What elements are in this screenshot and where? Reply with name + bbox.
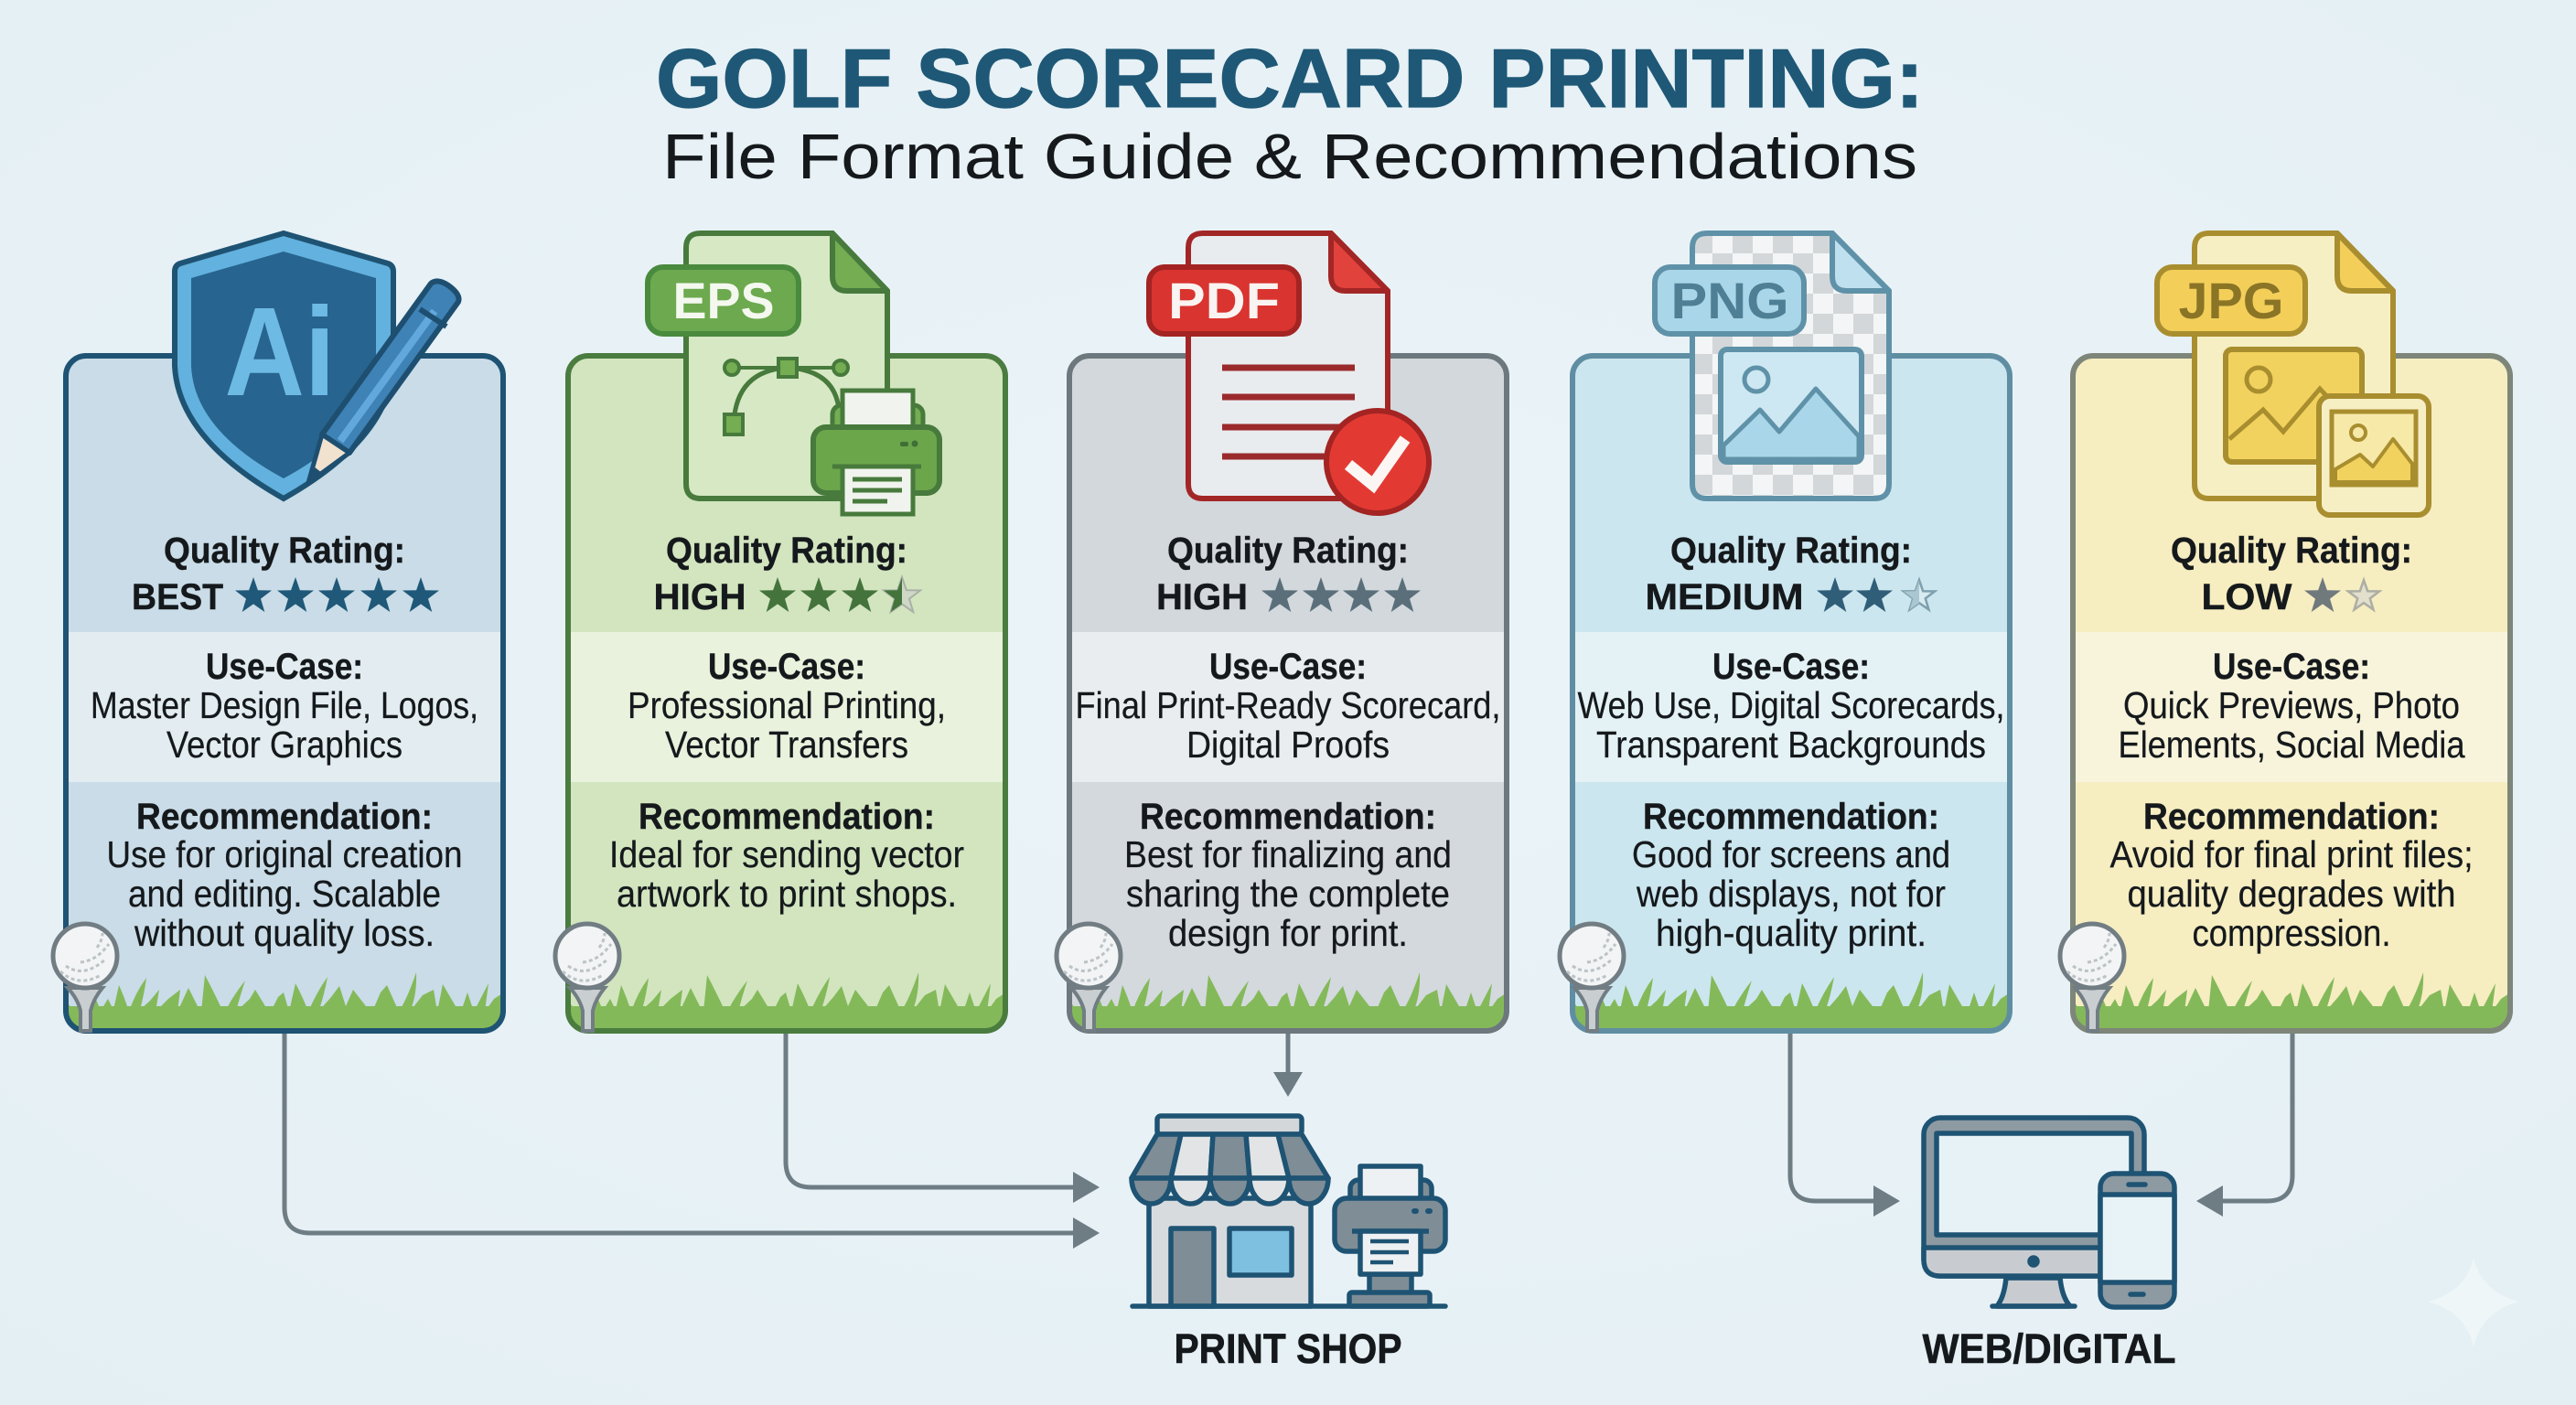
recommendation text: artwork to print shops.: [617, 873, 957, 915]
icon: golf ball on tee: [53, 924, 117, 1031]
recommendation text: design for print.: [1168, 912, 1408, 954]
icon: EPS file with printer: EPS: [673, 272, 774, 329]
quality rating: LOW: [2201, 577, 2292, 617]
use-case text: Quick Previews, Photo: [2123, 684, 2460, 726]
recommendation text: Avoid for final print files;: [2109, 833, 2474, 875]
quality rating: [1645, 531, 1935, 617]
use-case text: [628, 647, 946, 766]
recommendation text: web displays, not for: [1636, 873, 1946, 915]
use-case text: Use-Case:: [1712, 647, 1870, 687]
arrow: EPS to print shop: [786, 1034, 1100, 1203]
panel: EPS format: [555, 233, 1008, 1034]
title block: [656, 33, 1924, 192]
card background: [2069, 353, 2513, 1034]
icon: EPS file with printer: [648, 233, 939, 514]
use-case text: Elements, Social Media: [2119, 724, 2465, 766]
icon: golf ball on tee: [2060, 924, 2124, 1031]
label: web/digital: WEB/DIGITAL: [1923, 1325, 2175, 1372]
quality rating: [1156, 531, 1421, 617]
icon: two and a half stars: [1817, 577, 1935, 612]
card background: [564, 353, 1008, 1034]
recommendation text: [2109, 797, 2474, 954]
quality rating: Quality Rating:: [1670, 531, 1912, 571]
recommendation text: sharing the complete: [1126, 873, 1450, 915]
use-case text: Vector Graphics: [166, 724, 402, 766]
heading: GOLF SCORECARD PRINTING:: [656, 33, 1924, 125]
recommendation text: without quality loss.: [134, 912, 435, 954]
use-case text: [1577, 647, 2005, 766]
arrow: PNG to web/digital: [1790, 1034, 1900, 1217]
icon: JPG file with photos: [2157, 233, 2429, 515]
quality rating: Quality Rating:: [2171, 531, 2412, 571]
recommendation text: Ideal for sending vector: [609, 833, 964, 875]
recommendation text: high-quality print.: [1656, 912, 1927, 954]
icon: JPG file with photos: JPG: [2179, 272, 2283, 329]
card background: [1066, 353, 1509, 1034]
icon: golf ball on tee: [1560, 924, 1624, 1031]
quality rating: [132, 531, 439, 617]
use-case text: Professional Printing,: [628, 684, 946, 726]
subtitle: File Format Guide & Recommendations: [662, 121, 1917, 192]
icon: PDF file with check badge: PDF: [1168, 272, 1280, 329]
icon: golf ball on tee: [1057, 924, 1121, 1031]
icon: four stars: [1261, 577, 1421, 612]
recommendation text: and editing. Scalable: [128, 873, 441, 915]
icon: five stars: [235, 577, 439, 612]
use-case text: Final Print-Ready Scorecard,: [1076, 684, 1500, 726]
use-case text: Transparent Backgrounds: [1596, 724, 1986, 766]
panel: AI format: [53, 233, 506, 1034]
panel: PNG format: [1560, 233, 2012, 1034]
quality rating: MEDIUM: [1645, 577, 1804, 617]
recommendation text: [609, 797, 964, 915]
use-case text: Use-Case:: [1209, 647, 1367, 687]
quality rating: [2171, 531, 2412, 617]
arrow: JPG to web/digital: [2196, 1034, 2292, 1217]
icon: print shop: [1132, 1116, 1445, 1306]
quality rating: HIGH: [1156, 577, 1248, 617]
recommendation text: quality degrades with: [2128, 873, 2455, 915]
icon: PDF file with check badge: [1149, 233, 1429, 513]
quality rating: HIGH: [653, 577, 746, 617]
use-case text: Web Use, Digital Scorecards,: [1577, 684, 2005, 726]
recommendation text: Good for screens and: [1632, 833, 1950, 875]
recommendation text: [1632, 797, 1950, 954]
quality rating: Quality Rating:: [1167, 531, 1409, 571]
label: print shop: PRINT SHOP: [1175, 1325, 1401, 1372]
arrow: PDF to print shop: [1273, 1034, 1303, 1097]
icon: AI shield and pencil: Ai: [225, 282, 335, 423]
use-case text: [2119, 647, 2465, 766]
icon: AI shield and pencil: [175, 233, 459, 499]
icon: PNG file with transparency grid: [1655, 233, 1889, 499]
card background: [1569, 353, 2012, 1034]
quality rating: BEST: [132, 577, 223, 617]
quality rating: Quality Rating:: [164, 531, 405, 571]
recommendation text: Recommendation:: [2143, 797, 2440, 837]
recommendation text: Use for original creation: [106, 833, 463, 875]
use-case text: [1076, 647, 1500, 766]
panel: PDF format: [1057, 233, 1509, 1034]
recommendation text: [106, 797, 463, 954]
quality rating: Quality Rating:: [666, 531, 907, 571]
icon: one and a half stars: [2304, 577, 2379, 612]
icon: golf ball on tee: [555, 924, 619, 1031]
use-case text: Vector Transfers: [665, 724, 908, 766]
icon: PNG file with transparency grid: PNG: [1670, 272, 1789, 329]
recommendation text: Recommendation:: [136, 797, 433, 837]
recommendation text: [1124, 797, 1452, 954]
use-case text: [91, 647, 478, 766]
icon: monitor and phone: [1924, 1118, 2174, 1307]
icon: three and a half stars: [759, 577, 920, 612]
card background: [62, 353, 506, 1034]
recommendation text: Best for finalizing and: [1124, 833, 1452, 875]
use-case text: Master Design File, Logos,: [91, 684, 478, 726]
use-case text: Use-Case:: [708, 647, 865, 687]
quality rating: [653, 531, 920, 617]
use-case text: Digital Proofs: [1186, 724, 1390, 766]
recommendation text: Recommendation:: [1643, 797, 1939, 837]
panel: JPG format: [2060, 233, 2513, 1034]
arrow: AI to print shop: [284, 1034, 1100, 1249]
use-case text: Use-Case:: [206, 647, 363, 687]
recommendation text: Recommendation:: [639, 797, 935, 837]
icon: sparkle watermark: [2428, 1258, 2519, 1347]
recommendation text: Recommendation:: [1140, 797, 1436, 837]
use-case text: Use-Case:: [2213, 647, 2370, 687]
recommendation text: compression.: [2192, 912, 2391, 954]
